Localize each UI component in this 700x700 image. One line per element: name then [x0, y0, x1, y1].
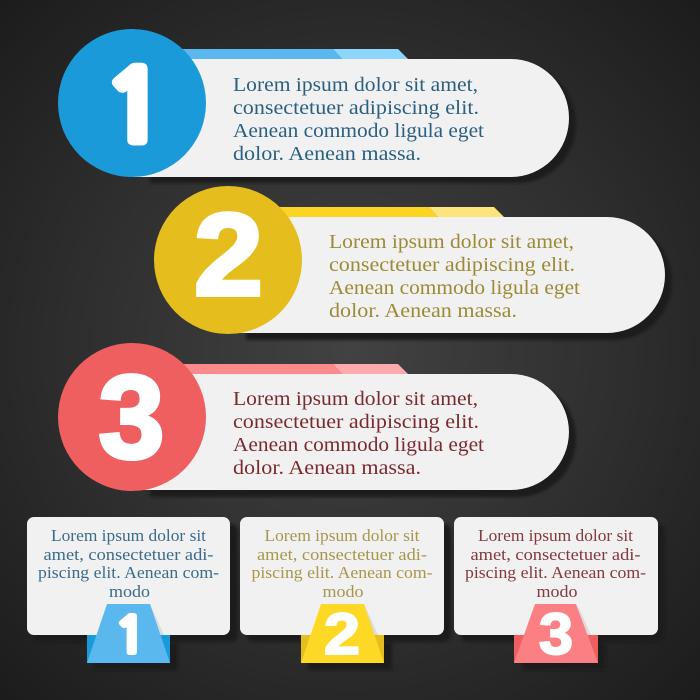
- card shadow 2: [247, 524, 451, 642]
- card text 3: [465, 526, 646, 601]
- tag number 1: 1: [114, 611, 147, 661]
- tag number 2: 2: [324, 602, 360, 667]
- card text 1: [38, 526, 219, 601]
- number 1: 1: [102, 59, 168, 156]
- text block 2: Aenean commodo ligula eget: [329, 277, 580, 299]
- circle 2: [154, 186, 302, 334]
- number 2: 2: [194, 189, 263, 320]
- card shadow 3: [461, 524, 665, 642]
- card text 1: Lorem ipsum dolor sit: [51, 526, 206, 545]
- tag 1: [87, 604, 170, 663]
- card shadow 1: [34, 524, 238, 642]
- card text 2: piscing elit. Aenean com-: [252, 563, 432, 582]
- text block 1: [233, 74, 484, 165]
- text block 1: dolor. Aenean massa.: [233, 143, 421, 165]
- panel: card 3: [454, 517, 665, 670]
- tab 2: [266, 207, 504, 217]
- text block 1: Aenean commodo ligula eget: [233, 120, 484, 142]
- tag 3: [514, 602, 598, 667]
- pill shadow 2: [246, 223, 672, 340]
- tag shadow 3: [522, 642, 606, 670]
- tab 1: [170, 49, 408, 59]
- pill 3: [130, 374, 569, 490]
- card text 1: modo: [109, 582, 150, 601]
- tag shadow 1: [94, 642, 178, 670]
- card text 3: modo: [536, 582, 578, 601]
- text block 2: [329, 231, 580, 322]
- panel: item 2: [154, 186, 672, 340]
- text block 3: dolor. Aenean massa.: [233, 457, 421, 479]
- panel: item 1: [58, 29, 576, 183]
- card text 3: amet, consectetuer adi-: [470, 545, 640, 564]
- text block 3: consectetuer adipiscing elit.: [233, 411, 479, 433]
- tag shadow 2: [308, 642, 392, 670]
- pill 1: [130, 59, 569, 177]
- text block 3: [233, 388, 484, 479]
- tab 3: [170, 364, 408, 374]
- text block 1: Lorem ipsum dolor sit amet,: [233, 74, 478, 96]
- panel: card 1: [27, 517, 238, 670]
- card text 2: amet, consectetuer adi-: [257, 545, 427, 564]
- tag 2: [301, 602, 384, 667]
- text block 1: consectetuer adipiscing elit.: [233, 97, 479, 119]
- tag number 3: 3: [539, 602, 573, 667]
- card body 1: [27, 517, 230, 635]
- card text 2: [252, 526, 432, 601]
- card body 3: [454, 517, 658, 635]
- card text 3: Lorem ipsum dolor sit: [478, 526, 633, 545]
- card text 1: piscing elit. Aenean com-: [38, 563, 219, 582]
- number 3: 3: [98, 352, 164, 484]
- card body 2: [240, 517, 444, 635]
- circle 3: [58, 343, 206, 491]
- card text 2: modo: [322, 582, 364, 601]
- text block 3: Aenean commodo ligula eget: [233, 434, 484, 456]
- text block 2: dolor. Aenean massa.: [329, 300, 517, 322]
- text block 2: consectetuer adipiscing elit.: [329, 254, 575, 276]
- text block 3: Lorem ipsum dolor sit amet,: [233, 388, 478, 410]
- circle 1: [58, 29, 206, 177]
- card text 3: piscing elit. Aenean com-: [465, 563, 646, 582]
- pill shadow 3: [150, 380, 576, 497]
- pill shadow 1: [150, 65, 576, 183]
- card text 1: amet, consectetuer adi-: [44, 545, 214, 564]
- panel: card 2: [240, 517, 451, 670]
- pill 2: [226, 217, 665, 333]
- panel: item 3: [58, 343, 576, 497]
- card text 2: Lorem ipsum dolor sit: [264, 526, 420, 545]
- text block 2: Lorem ipsum dolor sit amet,: [329, 231, 574, 253]
